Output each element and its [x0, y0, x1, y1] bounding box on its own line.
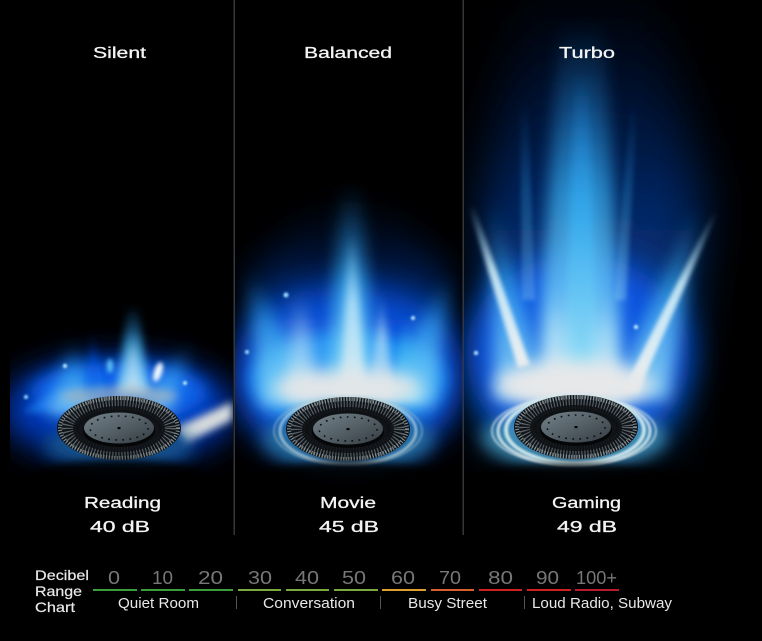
label: Reading: Reading [84, 495, 161, 512]
panel: balanced [230, 45, 466, 536]
decibel scale numbers: 40 [295, 568, 319, 588]
decibel scale numbers: 30 [248, 568, 272, 588]
range labels: Conversation [263, 595, 355, 612]
value: 49 dB: 49 dB [557, 519, 617, 536]
decibel scale numbers: 80 [488, 568, 513, 588]
decibel scale numbers: 10 [152, 568, 173, 588]
panel: silent [1, 45, 237, 536]
colored scale bars [93, 589, 619, 591]
range labels: Busy Street [408, 595, 488, 612]
label: Gaming: Gaming [552, 495, 621, 512]
airflow: turbo [464, 0, 718, 500]
decibel scale numbers: 60 [391, 568, 415, 588]
range labels: Loud Radio, Subway [532, 595, 672, 612]
value: 40 dB: 40 dB [90, 519, 150, 536]
range labels: Quiet Room [118, 595, 199, 612]
decibel range chart [35, 567, 672, 615]
value: 45 dB: 45 dB [319, 519, 379, 536]
chart title: Range [35, 583, 82, 599]
chart title: Chart [35, 599, 75, 615]
label: Silent: Silent [93, 45, 147, 62]
range labels [118, 595, 672, 612]
airflow: silent [10, 306, 233, 470]
decibel scale numbers: 90 [536, 568, 559, 588]
decibel scale numbers: 50 [342, 568, 366, 588]
decibel scale numbers: 70 [439, 568, 461, 588]
decibel scale numbers: 100+ [576, 568, 617, 588]
decibel scale numbers: 20 [198, 568, 223, 588]
panel: turbo [464, 0, 718, 536]
decibel scale numbers [108, 568, 617, 588]
airflow: balanced [235, 188, 463, 472]
divider right [462, 0, 464, 535]
label: Turbo: Turbo [559, 45, 615, 62]
decibel scale numbers: 0 [108, 568, 120, 588]
label: Movie: Movie [320, 495, 376, 512]
chart title [35, 567, 89, 615]
chart title: Decibel [35, 567, 89, 583]
label: Balanced: Balanced [304, 45, 392, 62]
divider left [234, 0, 235, 535]
